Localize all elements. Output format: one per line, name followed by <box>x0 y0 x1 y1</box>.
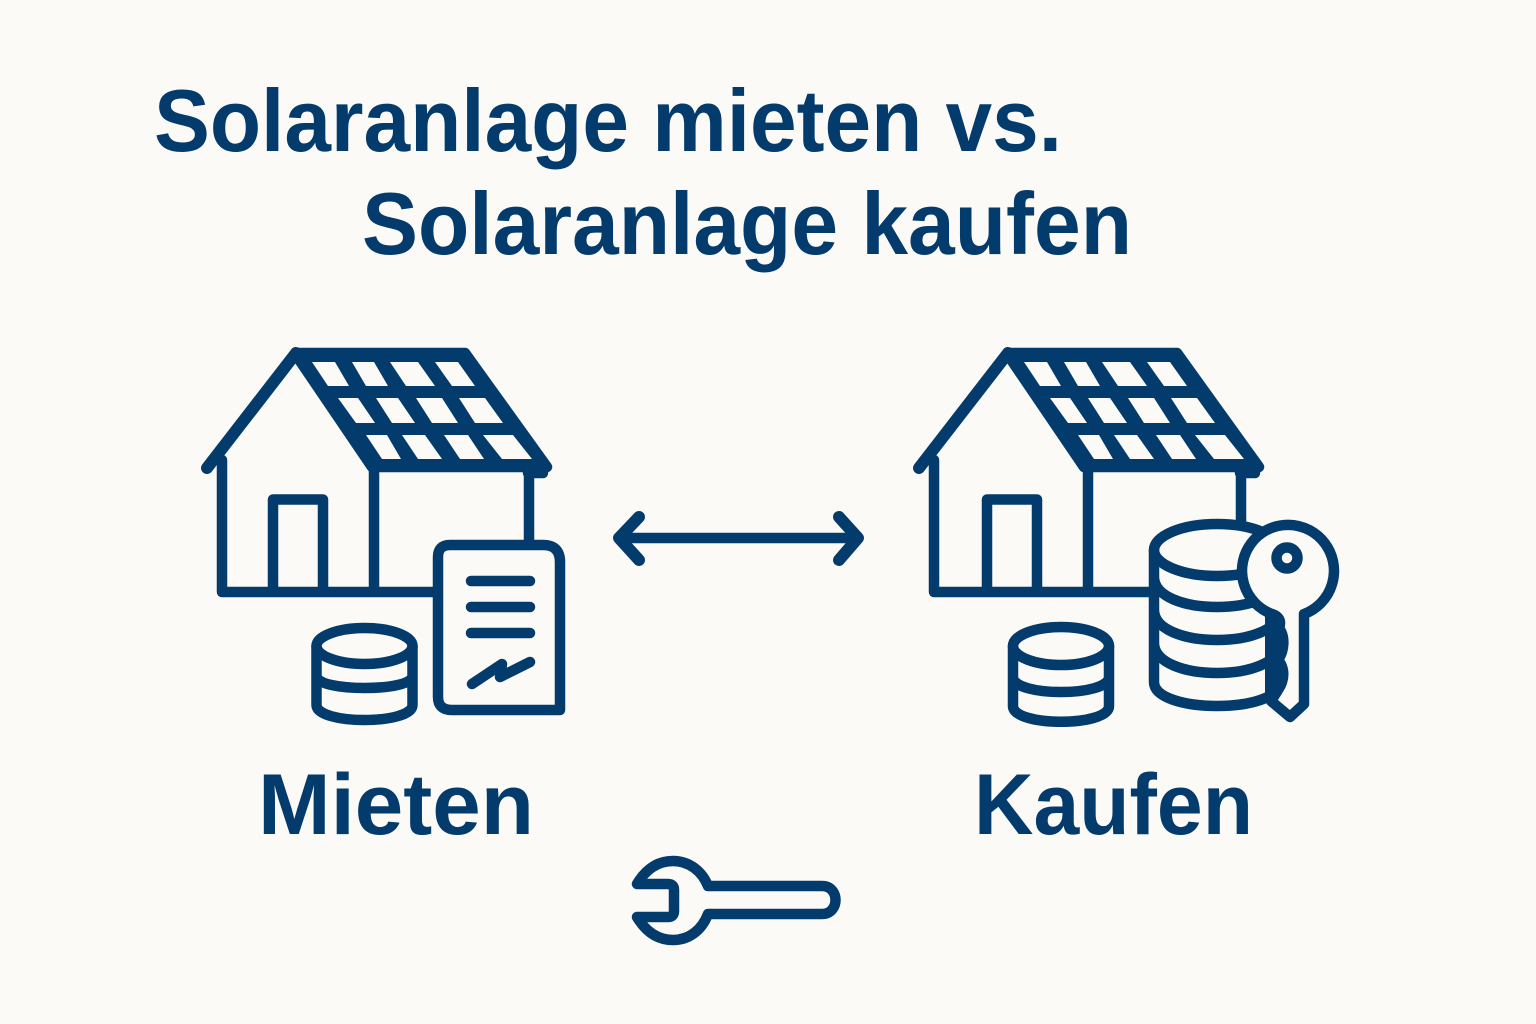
title: Solaranlage mieten vs. <box>154 71 1062 170</box>
icon: coin stack (rent) <box>316 628 412 720</box>
label: Kaufen: Kaufen <box>974 757 1253 853</box>
icon: house with solar panels (buy) <box>919 353 1259 592</box>
icon: house with solar panels (rent) <box>207 353 547 592</box>
double arrow <box>619 517 858 560</box>
icon: key <box>1242 525 1334 717</box>
icon: large coin stack <box>1154 524 1283 706</box>
icon: coin stack (buy) <box>1013 627 1109 722</box>
icon: wrench <box>637 861 836 940</box>
title <box>154 71 1132 273</box>
icon: contract document <box>438 545 560 710</box>
title: Solaranlage kaufen <box>362 174 1132 273</box>
label: Mieten: Mieten <box>258 757 534 853</box>
